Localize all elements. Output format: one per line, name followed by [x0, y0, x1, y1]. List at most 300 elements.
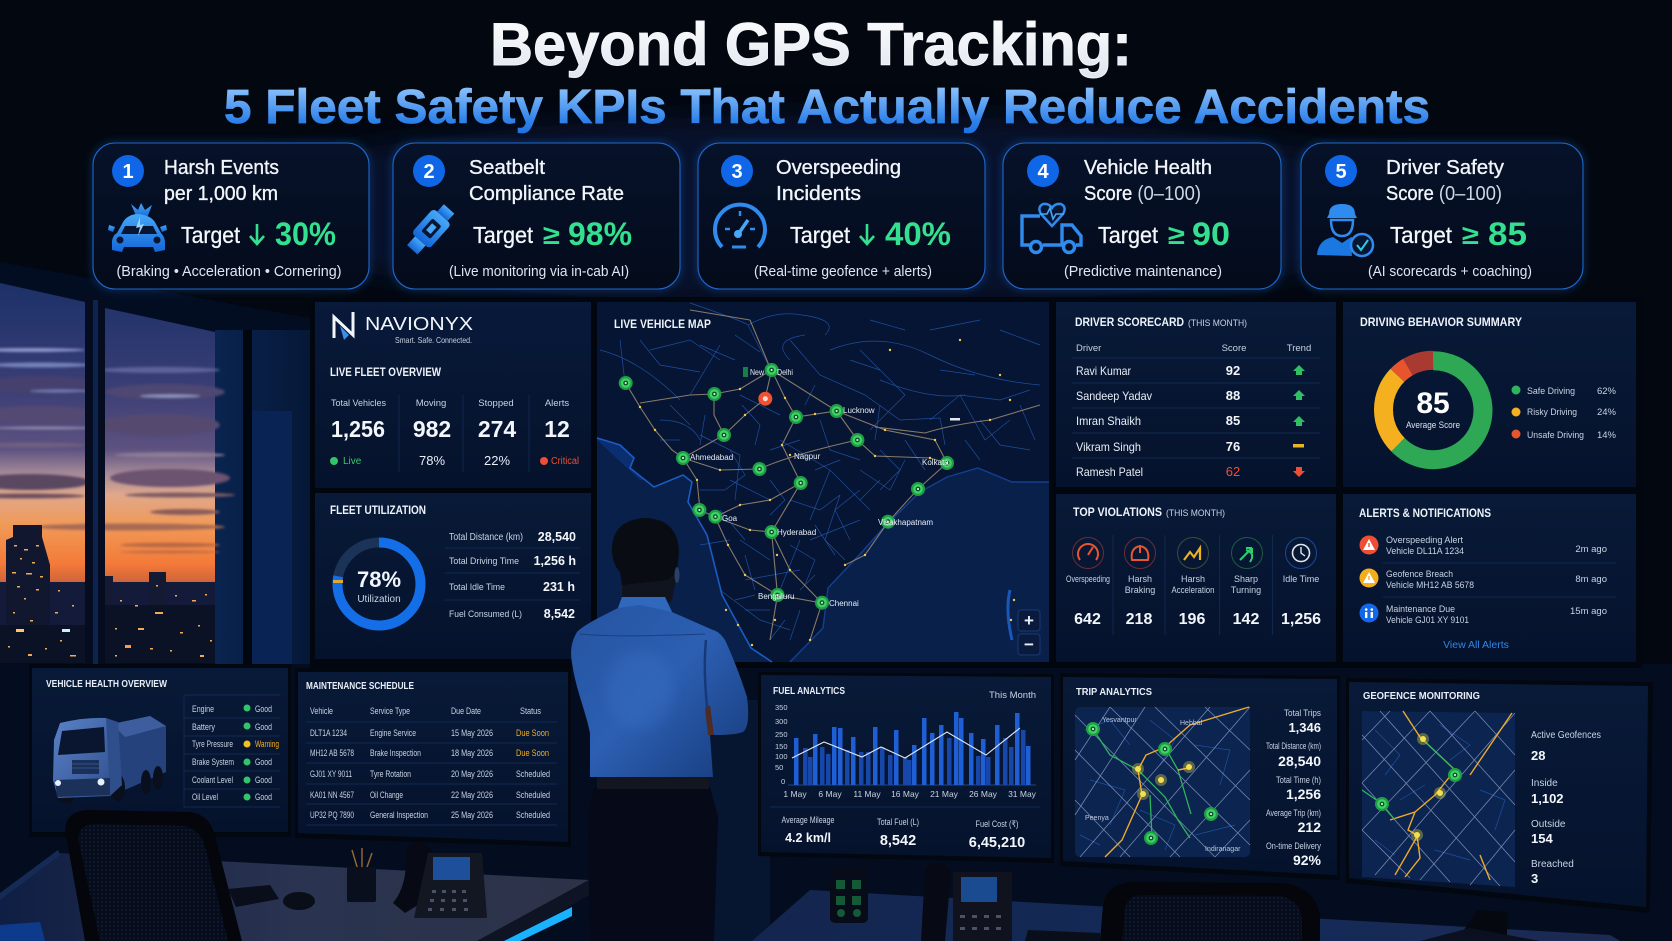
trip route map: Peenya — [1085, 815, 1109, 822]
scorecard table: 88 — [1226, 388, 1240, 403]
map landmass — [597, 302, 1049, 662]
fleet stat: stopped: 22% — [484, 453, 510, 468]
vehicle status list: Good — [255, 757, 272, 767]
trip stats: 92% — [1293, 852, 1322, 868]
target 5 — [1390, 216, 1527, 252]
fleet stat: moving: 982 — [413, 416, 451, 442]
geofence stats: 154 — [1531, 831, 1553, 846]
scorecard table: 92 — [1226, 363, 1240, 378]
violation: harsh braking: 218 — [1126, 611, 1152, 628]
fuel stat: average mileage: 4.2 km/l — [785, 831, 831, 845]
utilization stats: 28,540 — [538, 530, 576, 544]
heading: alerts and notifications: ALERTS & NOTIFICATIONS — [1359, 508, 1491, 520]
KPI 3 heading: Incidents — [776, 183, 861, 205]
illustration: desk items left — [228, 842, 487, 918]
heading: trip analytics: TRIP ANALYTICS — [1076, 686, 1152, 698]
fuel stat: average mileage — [782, 815, 834, 845]
fleet stat: total vehicles: Total Vehicles — [331, 398, 386, 409]
target 2 — [473, 216, 632, 252]
scorecard table: 85 — [1226, 413, 1240, 428]
pen holder — [347, 848, 376, 902]
trip stats: 212 — [1298, 819, 1321, 835]
violation: sharp turning: Turning — [1231, 585, 1261, 595]
heading: geofence monitoring: GEOFENCE MONITORING — [1363, 690, 1480, 702]
utilization stats: Total Distance (km) — [449, 532, 523, 543]
maintenance table: Scheduled — [516, 790, 550, 800]
utilization stats: 231 h — [543, 580, 575, 594]
trip stats: 1,346 — [1288, 720, 1321, 735]
fleet stat: total vehicles — [330, 398, 386, 467]
scorecard table: Score — [1222, 343, 1246, 354]
KPI 1 heading: Harsh Events — [164, 157, 279, 179]
geofence stats: 1,102 — [1531, 791, 1564, 806]
fleet stat: moving: Moving — [416, 398, 446, 409]
panel: alerts and notifications — [1343, 494, 1636, 662]
donut chart: 78% utilization: Utilization — [357, 594, 401, 605]
KPI 2 heading — [469, 157, 624, 205]
main video wall frame — [310, 297, 1642, 668]
map city labels: Visakhapatnam — [878, 518, 933, 527]
illustration: desk items right — [830, 863, 1100, 941]
fuel stat: average mileage: Average Mileage — [782, 815, 834, 825]
maintenance table: UP32 PQ 7890 — [310, 810, 354, 820]
vehicle status list — [184, 695, 280, 807]
maintenance table: Scheduled — [516, 769, 550, 779]
KPI 5 heading: Driver Safety — [1386, 157, 1504, 179]
alert: maintenance due: Maintenance Due — [1386, 604, 1455, 615]
geofence stats — [1531, 729, 1601, 886]
donut legend: Safe Driving — [1527, 386, 1575, 397]
maintenance table: Scheduled — [516, 810, 550, 820]
KPI 5 heading — [1386, 157, 1504, 205]
panel: live vehicle map — [597, 302, 1049, 662]
keyboard — [228, 885, 279, 907]
violation: harsh acceleration: Harsh — [1181, 574, 1205, 584]
head — [612, 518, 679, 585]
violation: harsh braking: Braking — [1125, 585, 1155, 595]
panel: top violations — [1056, 494, 1336, 662]
alert: overspeeding — [1360, 535, 1607, 557]
trip route map: Yesvantpur — [1102, 717, 1137, 724]
map zoom controls: − — [1024, 635, 1034, 654]
panel: fuel analytics — [758, 672, 1054, 863]
logo: Navionyx: NAVIONYX — [365, 314, 473, 334]
utilization stats: Total Idle Time — [449, 582, 505, 593]
logo: Navionyx — [334, 312, 473, 345]
target 5: ≥ — [1462, 220, 1479, 250]
keyboard — [1025, 930, 1100, 941]
donut legend: 62% — [1597, 386, 1617, 397]
link: view all alerts: View All Alerts — [1443, 639, 1509, 651]
map city labels: Chennai — [829, 599, 859, 608]
panel: KPI 1 harsh events — [93, 143, 369, 289]
maintenance table: Vehicle — [310, 706, 333, 716]
vehicle status list: Good — [255, 775, 272, 785]
map city labels — [690, 367, 949, 608]
map city labels: Lucknow — [843, 406, 875, 415]
mouse — [283, 892, 315, 910]
fleet stat: alerts: 12 — [544, 416, 570, 442]
fleet stat: alerts: Critical — [551, 456, 579, 467]
panel: live fleet overview with logo — [315, 302, 591, 488]
bar and line chart: fuel consumption: 100 — [775, 752, 788, 761]
target 1: 30% — [275, 216, 336, 252]
badge 2 — [413, 155, 445, 187]
target 4: ≥ — [1168, 220, 1185, 250]
fleet stat: alerts — [540, 398, 579, 467]
badge 5: 5 — [1335, 161, 1347, 183]
maintenance table: Oil Change — [370, 790, 403, 800]
scorecard table: Ravi Kumar — [1076, 364, 1131, 378]
neck and beard — [622, 570, 678, 606]
KPI 4 heading: Vehicle Health — [1084, 157, 1212, 179]
KPI 3 heading — [776, 157, 901, 205]
badge 3 — [721, 155, 753, 187]
map city labels: Ahmedabad — [690, 453, 733, 462]
violation: harsh braking: Harsh — [1128, 574, 1152, 584]
KPI 1 heading — [164, 157, 279, 205]
heading: fleet utilization: FLEET UTILIZATION — [330, 505, 426, 517]
heading: top violations: TOP VIOLATIONS — [1073, 507, 1162, 519]
map eastern coastline and islands — [790, 468, 1049, 662]
vehicle status list: Good — [255, 792, 272, 802]
target 4: 90 — [1192, 216, 1230, 252]
geofence stats: Outside — [1531, 819, 1566, 830]
illustration: office chair right — [1100, 882, 1320, 941]
vehicle status list: Battery — [192, 722, 215, 732]
desk phone — [393, 842, 487, 918]
maintenance table: GJ01 XY 9011 — [310, 769, 352, 779]
trip stats: 1,256 — [1286, 786, 1321, 802]
trip stats: 28,540 — [1278, 753, 1321, 769]
alert: geofence breach: 8m ago — [1575, 574, 1607, 585]
maintenance table: Due Soon — [516, 728, 549, 738]
bar and line chart: fuel consumption: 6 May — [818, 789, 842, 799]
map zoom controls — [1018, 610, 1040, 655]
title line 1: Beyond GPS Tracking: — [490, 11, 1132, 78]
badge 2: 2 — [423, 161, 435, 183]
alert: overspeeding: Overspeeding Alert — [1386, 535, 1463, 546]
violation: idle time: 1,256 — [1281, 611, 1321, 628]
KPI 3 note: (Real-time geofence + alerts) — [754, 263, 932, 280]
trip stats: Total Time (h) — [1276, 775, 1321, 786]
bar and line chart: fuel consumption: 31 May — [1008, 789, 1037, 799]
geofence map — [1362, 711, 1515, 887]
donut legend: 14% — [1597, 430, 1617, 441]
icon: seatbelt buckle — [403, 201, 458, 258]
vehicle status list: Good — [255, 722, 272, 732]
scorecard table: Driver — [1076, 343, 1101, 354]
heading: maintenance schedule: MAINTENANCE SCHEDULE — [306, 680, 414, 692]
belt — [597, 777, 709, 789]
bar and line chart: fuel consumption: 50 — [775, 763, 783, 772]
title — [224, 11, 1430, 134]
fuel stat: total fuel — [877, 817, 919, 849]
KPI 4 note: (Predictive maintenance) — [1064, 263, 1222, 280]
utilization stats: Total Driving Time — [449, 556, 519, 567]
map city labels: Goa — [722, 514, 738, 523]
panel: trip analytics — [1060, 673, 1340, 880]
heading: fuel analytics — [773, 685, 1036, 701]
panel: KPI 5 driver safety — [1301, 143, 1583, 289]
hand shadow — [705, 705, 714, 735]
maintenance table: Engine Service — [370, 728, 416, 738]
donut chart: average score 85 — [1383, 360, 1483, 460]
maintenance table: Due Date — [451, 706, 481, 716]
fleet stat: total vehicles: 1,256 — [331, 416, 385, 442]
bar and line chart: fuel consumption: 26 May — [969, 789, 998, 799]
KPI 5 heading: Score (0–100) — [1386, 183, 1502, 205]
scorecard table: Sandeep Yadav — [1076, 389, 1152, 403]
heading: live fleet overview: LIVE FLEET OVERVIEW — [330, 367, 441, 379]
violation: idle time: Idle Time — [1283, 574, 1319, 584]
map city labels: Kolkata — [922, 458, 949, 467]
scorecard table: Imran Shaikh — [1076, 414, 1141, 428]
bar and line chart: fuel consumption: 21 May — [930, 789, 959, 799]
map city labels: Hyderabad — [777, 528, 816, 537]
violation: harsh braking — [1124, 538, 1156, 628]
utilization stats — [445, 530, 580, 621]
geofence stats: Active Geofences — [1531, 729, 1601, 741]
maintenance table: 22 May 2026 — [451, 790, 493, 800]
map city labels: Bengaluru — [758, 592, 794, 601]
vehicle status list: Brake System — [192, 757, 234, 767]
target 3: Target — [790, 222, 851, 248]
badge 1: 1 — [122, 161, 134, 183]
donut legend: 24% — [1597, 407, 1617, 418]
alert: maintenance due: Vehicle GJ01 XY 9101 — [1386, 615, 1469, 626]
fuel stat: total fuel: Total Fuel (L) — [877, 817, 919, 827]
map waypoint dots — [639, 339, 1015, 646]
shirt — [571, 597, 748, 777]
vehicle status list: Engine — [192, 704, 214, 714]
map vehicle pins — [619, 363, 954, 610]
bar and line chart: fuel consumption — [775, 703, 1037, 799]
violation: harsh acceleration — [1172, 538, 1214, 628]
maintenance table: KA01 NN 4567 — [310, 790, 354, 800]
violation: harsh acceleration: Acceleration — [1172, 585, 1214, 595]
bar and line chart: fuel consumption: 300 — [775, 717, 788, 726]
panel: fleet utilization — [315, 493, 591, 659]
maintenance table: Tyre Rotation — [370, 769, 411, 779]
map coastline — [597, 438, 772, 662]
panel: KPI 2 seatbelt — [393, 143, 680, 289]
target 4 — [1098, 216, 1230, 252]
fuel stat: fuel cost: 6,45,210 — [969, 835, 1025, 851]
badge 4 — [1027, 155, 1059, 187]
illustration: man viewing the dashboards — [571, 518, 748, 941]
icon: speedometer — [715, 205, 765, 247]
vehicle status list: Warning — [255, 739, 279, 749]
map highways — [626, 310, 1040, 640]
map city labels: Delhi — [777, 368, 793, 377]
smartphone — [830, 867, 868, 923]
alert: geofence breach: Geofence Breach — [1386, 569, 1453, 580]
fleet stat: total vehicles: Live — [343, 456, 362, 467]
maintenance table: 20 May 2026 — [451, 769, 493, 779]
desk left — [0, 850, 589, 941]
trip stats: On-time Delivery — [1266, 841, 1321, 852]
fleet stat: stopped: Stopped — [478, 398, 514, 409]
logo: Navionyx: Smart. Safe. Connected. — [395, 335, 472, 345]
badge 3: 3 — [731, 161, 743, 183]
bar and line chart: fuel consumption: 150 — [775, 742, 788, 751]
violation: sharp turning — [1231, 538, 1262, 628]
utilization stats: 1,256 h — [534, 554, 576, 568]
heading: driver scorecard: (THIS MONTH) — [1188, 318, 1247, 328]
heading: vehicle health overview: VEHICLE HEALTH OVERVIEW — [46, 678, 167, 690]
maintenance table: 15 May 2026 — [451, 728, 493, 738]
scorecard table: Vikram Singh — [1076, 440, 1141, 454]
maintenance table: 18 May 2026 — [451, 748, 493, 758]
fleet stat: stopped: 274 — [478, 416, 516, 442]
panel: driving behavior summary — [1343, 302, 1636, 487]
desk phone — [921, 863, 1012, 941]
ear — [674, 567, 680, 583]
map zoom controls: + — [1024, 611, 1034, 630]
heading: top violations — [1073, 507, 1225, 519]
donut chart: 78% utilization — [333, 542, 420, 626]
heading: top violations: (THIS MONTH) — [1166, 508, 1225, 518]
maintenance table: MH12 AB 5678 — [310, 748, 354, 758]
fuel stat: total fuel: 8,542 — [880, 833, 916, 849]
violation: sharp turning: 142 — [1233, 611, 1259, 628]
window with sunset city view — [0, 283, 235, 665]
geofence stats: 3 — [1531, 871, 1538, 886]
maintenance table: Brake Inspection — [370, 748, 421, 758]
panel: geofence monitoring — [1346, 678, 1653, 913]
scorecard table: Trend — [1287, 343, 1311, 354]
heading: driver scorecard: DRIVER SCORECARD — [1075, 317, 1184, 329]
alert: maintenance due — [1360, 604, 1607, 626]
heading: live vehicle map: LIVE VEHICLE MAP — [614, 319, 711, 331]
donut legend: Unsafe Driving — [1527, 430, 1584, 441]
panel: driver scorecard — [1056, 302, 1336, 487]
target 3: 40% — [885, 216, 951, 252]
KPI 1 heading: per 1,000 km — [164, 183, 278, 205]
fuel stat: fuel cost — [969, 819, 1025, 851]
badge 4: 4 — [1037, 161, 1049, 183]
fleet stat: stopped — [478, 398, 516, 468]
geofence stats: Inside — [1531, 778, 1558, 789]
panel: maintenance schedule — [295, 668, 571, 847]
violation: sharp turning: Sharp — [1234, 574, 1258, 584]
KPI 2 heading: Seatbelt — [469, 157, 545, 179]
map road network — [600, 303, 1040, 640]
badge 1 — [112, 155, 144, 187]
illustration: truck — [53, 716, 166, 803]
KPI 2 heading: Compliance Rate — [469, 183, 624, 205]
donut chart: average score 85: Average Score — [1406, 420, 1460, 431]
fuel stat: fuel cost: Fuel Cost (₹) — [976, 819, 1019, 829]
KPI 4 heading — [1084, 157, 1212, 205]
target 4: Target — [1098, 222, 1159, 248]
KPI 1 note: (Braking • Acceleration • Cornering) — [116, 263, 342, 280]
alert: geofence breach: Vehicle MH12 AB 5678 — [1386, 580, 1474, 591]
donut chart: average score 85: 85 — [1416, 387, 1450, 420]
icon: truck with heart — [1022, 204, 1081, 252]
vehicle status list: Good — [255, 704, 272, 714]
alert: overspeeding: Vehicle DL11A 1234 — [1386, 546, 1464, 557]
geofence stats: 28 — [1531, 748, 1545, 763]
map city labels: Nagpur — [794, 452, 821, 461]
violation: overspeeding: Overspeeding — [1066, 574, 1110, 584]
panel: KPI 4 vehicle health — [1003, 143, 1281, 289]
target 3 — [790, 216, 951, 252]
panel: KPI 3 overspeeding — [698, 143, 985, 289]
scorecard table — [1072, 343, 1320, 479]
alert: maintenance due: 15m ago — [1570, 606, 1607, 617]
bar and line chart: fuel consumption: 11 May — [853, 789, 881, 799]
alert: overspeeding: 2m ago — [1575, 544, 1607, 555]
heading: fuel analytics: This Month — [989, 690, 1036, 701]
badge 5 — [1325, 155, 1357, 187]
violation: idle time — [1281, 538, 1321, 628]
maintenance table: 25 May 2026 — [451, 810, 493, 820]
maintenance table: Service Type — [370, 706, 410, 716]
target 2: 98% — [568, 216, 632, 252]
collar — [618, 597, 672, 612]
map city labels: New — [750, 368, 764, 377]
fleet stat: alerts: Alerts — [545, 398, 569, 409]
geofence stats: Breached — [1531, 859, 1574, 870]
KPI 2 note: (Live monitoring via in-cab AI) — [449, 263, 629, 280]
trip route map — [1075, 707, 1250, 857]
scorecard table: 76 — [1226, 439, 1240, 454]
trip stats — [1266, 708, 1322, 868]
fleet stat: moving: 78% — [419, 453, 445, 468]
donut legend: Risky Driving — [1527, 407, 1577, 418]
panel: vehicle health overview — [29, 664, 291, 837]
KPI 4 heading: Score (0–100) — [1084, 183, 1201, 205]
violation: overspeeding: 642 — [1074, 611, 1101, 628]
trip stats: Total Distance (km) — [1266, 741, 1321, 751]
trip stats: Total Trips — [1284, 708, 1321, 719]
maintenance table — [306, 706, 557, 825]
trip route map: Indiranagar — [1205, 846, 1241, 853]
trip route map: Hebbal — [1180, 720, 1203, 727]
trousers — [588, 787, 718, 941]
target 5: 85 — [1488, 216, 1527, 252]
heading: driving behavior summary: DRIVING BEHAVIOR SUMMARY — [1360, 317, 1522, 329]
violation: overspeeding — [1066, 538, 1110, 628]
violation: harsh acceleration: 196 — [1179, 611, 1205, 628]
maintenance table: DLT1A 1234 — [310, 728, 347, 738]
scorecard table: Ramesh Patel — [1076, 465, 1143, 479]
donut legend — [1512, 386, 1617, 441]
vehicle status list: Oil Level — [192, 792, 218, 802]
target 1: Target — [181, 222, 241, 248]
target 2: ≥ — [543, 220, 560, 250]
KPI 5 note: (AI scorecards + coaching) — [1368, 263, 1532, 280]
KPI 3 heading: Overspeeding — [776, 157, 901, 179]
heading: fuel analytics: FUEL ANALYTICS — [773, 685, 845, 697]
target 2: Target — [473, 222, 534, 248]
trip stats: Average Trip (km) — [1266, 808, 1321, 818]
scorecard table: 62 — [1226, 464, 1240, 479]
utilization stats: 8,542 — [544, 607, 575, 621]
maintenance table: General Inspection — [370, 810, 428, 820]
bar and line chart: fuel consumption: 0 — [781, 777, 785, 786]
vehicle status list: Tyre Pressure — [192, 739, 233, 749]
utilization stats: Fuel Consumed (L) — [449, 609, 522, 620]
illustration: office chair left — [65, 810, 242, 941]
title line 2: 5 Fleet Safety KPIs That Actually Reduce Accidents — [224, 81, 1430, 134]
maintenance table: Due Soon — [516, 748, 549, 758]
vehicle status list: Coolant Level — [192, 775, 233, 785]
alert: geofence breach — [1360, 568, 1607, 591]
bar and line chart: fuel consumption: 1 May — [783, 789, 807, 799]
